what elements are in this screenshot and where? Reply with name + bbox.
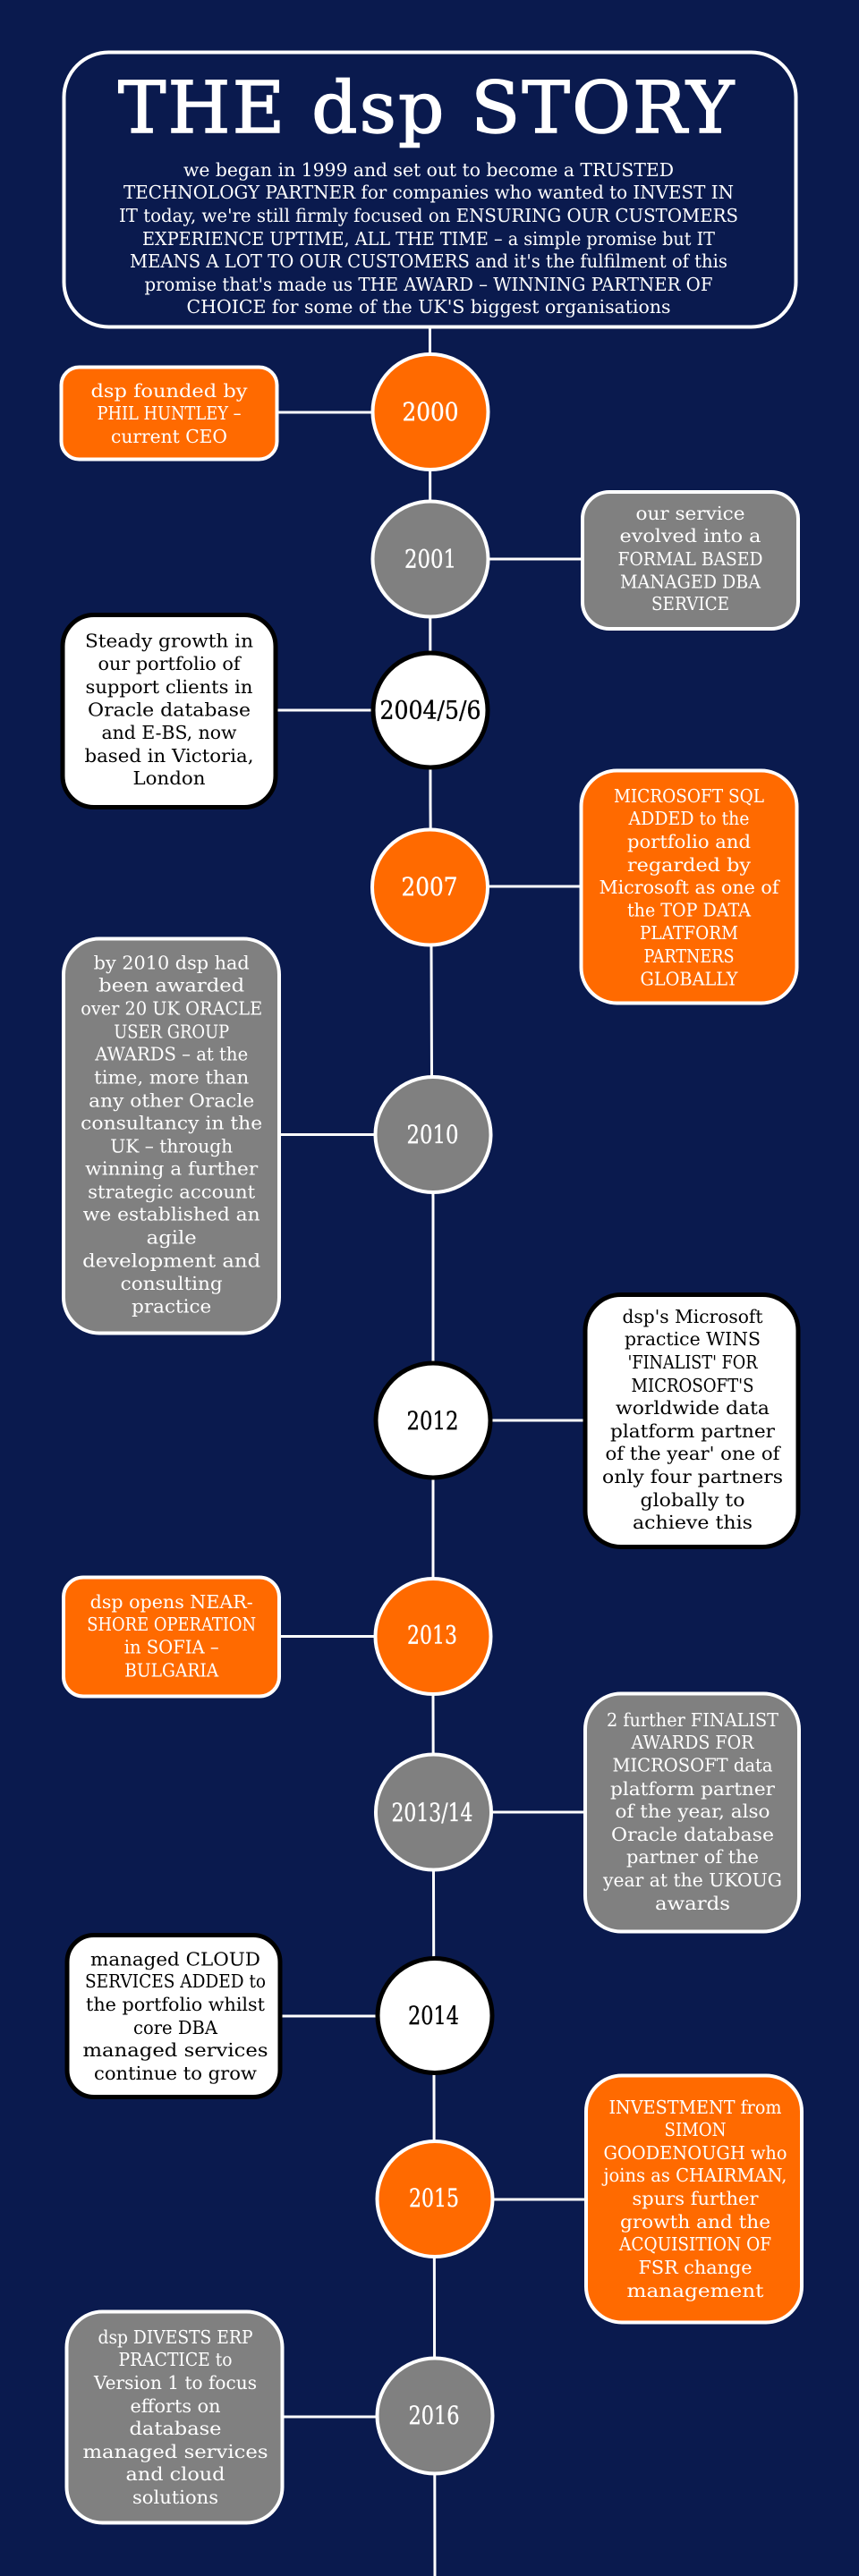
box: 2013/14: year at the UKOUG xyxy=(602,1869,782,1891)
year circle: 2001 xyxy=(372,501,489,617)
box: 2013/14: MICROSOFT data xyxy=(612,1755,773,1776)
box: 2001: evolved into a xyxy=(619,525,761,547)
box: 2012: only four partners xyxy=(602,1466,783,1487)
box: 2016: dsp DIVESTS ERP xyxy=(98,2326,253,2348)
box: 2010: UK – through xyxy=(110,1136,233,1157)
year circle: 2014 xyxy=(378,1959,492,2073)
year circle: 2013 xyxy=(376,1579,490,1694)
box: 2000: PHIL HUNTLEY – xyxy=(97,402,242,424)
box: 2012: achieve this xyxy=(633,1512,753,1533)
box: 2007: PLATFORM xyxy=(640,922,738,944)
box: 2007: portfolio and xyxy=(627,831,751,852)
box: 2015: INVESTMENT from xyxy=(608,2097,782,2118)
year circle: 2013/14: 2013/14 xyxy=(392,1798,472,1827)
box: 2013/14: AWARDS FOR xyxy=(631,1732,754,1753)
timeline spine xyxy=(430,327,435,2576)
box: 2000: current CEO xyxy=(111,426,227,447)
box: 2016: database xyxy=(129,2418,222,2439)
box: 2012: of the year' one of xyxy=(605,1443,781,1464)
year circle: 2010: 2010 xyxy=(406,1120,458,1149)
year circle: 2016: 2016 xyxy=(408,2401,460,2430)
box: 2012: worldwide data xyxy=(616,1397,770,1419)
box: 2001: MANAGED DBA xyxy=(620,571,761,592)
year circle: 2010 xyxy=(376,1077,490,1192)
box: 2010: agile xyxy=(147,1227,197,1249)
entry: 2001 xyxy=(372,492,798,629)
box: 2010: AWARDS – at the xyxy=(94,1043,248,1064)
box: 2010: strategic account xyxy=(88,1181,256,1202)
box: 2001: SERVICE xyxy=(651,593,729,614)
intro text xyxy=(119,159,738,318)
box: 2014: SERVICES ADDED to xyxy=(85,1970,266,1992)
box: 2000 xyxy=(61,367,277,460)
box: 2010: practice xyxy=(132,1295,211,1317)
box: 2001 xyxy=(583,492,798,629)
box: 2010: development and xyxy=(82,1250,260,1272)
box: 2015: FSR change xyxy=(639,2257,752,2278)
box: 2015: GOODENOUGH who xyxy=(603,2142,787,2164)
entry: 2007 xyxy=(372,771,796,1004)
box: 2012 xyxy=(585,1295,798,1547)
box: 2012: 'FINALIST' FOR xyxy=(628,1352,758,1373)
entry: 2004/5/6 xyxy=(63,615,488,807)
box: 2010: been awarded xyxy=(98,975,244,996)
box: 2010: consultancy in the xyxy=(81,1113,262,1134)
box: 2016: efforts on xyxy=(131,2395,220,2417)
box: 2013/14: platform partner xyxy=(610,1778,775,1800)
box: 2004/5/6: London xyxy=(132,767,206,789)
year circle: 2001: 2001 xyxy=(404,544,456,574)
box: 2007: Microsoft as one of xyxy=(600,877,780,898)
box: 2010: we established an xyxy=(83,1204,260,1225)
box: 2014: managed CLOUD xyxy=(90,1948,260,1970)
box: 2010: any other Oracle xyxy=(89,1089,254,1111)
year circle: 2007 xyxy=(372,830,488,945)
box: 2015: spurs further xyxy=(632,2188,759,2209)
intro text: IT today, we're still firmly focused on ENSURING OUR CUSTOMERS xyxy=(119,205,738,226)
entry: 2016 xyxy=(66,2311,492,2522)
box: 2015: ACQUISITION OF xyxy=(618,2233,771,2255)
box: 2013: BULGARIA xyxy=(124,1660,218,1682)
box: 2013/14 xyxy=(585,1694,799,1932)
box: 2013: dsp opens NEAR- xyxy=(90,1591,253,1613)
box: 2016: and cloud xyxy=(125,2463,225,2485)
year circle: 2012: 2012 xyxy=(406,1406,458,1436)
box: 2013/14: 2 further FINALIST xyxy=(607,1709,778,1731)
box: 2013/14: partner of the xyxy=(626,1846,759,1868)
box: 2015: joins as CHAIRMAN, xyxy=(602,2165,787,2186)
box: 2007 xyxy=(582,771,796,1004)
intro text: EXPERIENCE UPTIME, ALL THE TIME – a simple promise but IT xyxy=(142,228,715,250)
box: 2012: MICROSOFT'S xyxy=(632,1375,753,1396)
intro text: MEANS A LOT TO OUR CUSTOMERS and it's the fulfilment of this xyxy=(130,250,727,272)
box: 2014: managed services xyxy=(82,2039,268,2061)
year circle: 2015 xyxy=(378,2141,492,2257)
box: 2016: solutions xyxy=(132,2487,218,2508)
box: 2004/5/6: Steady growth in xyxy=(85,630,253,651)
year circle: 2007: 2007 xyxy=(401,872,458,902)
entry: 2013 xyxy=(64,1578,490,1696)
box: 2004/5/6: based in Victoria, xyxy=(84,745,254,767)
box: 2013/14: of the year, also xyxy=(616,1801,770,1822)
box: 2004/5/6 xyxy=(63,615,276,807)
box: 2001: our service xyxy=(635,503,744,524)
intro text: we began in 1999 and set out to become a TRUSTED xyxy=(183,159,674,181)
box: 2013/14: awards xyxy=(655,1893,730,1914)
year circle: 2015: 2015 xyxy=(409,2183,459,2213)
year circle: 2014: 2014 xyxy=(408,2001,459,2030)
box: 2016: Version 1 to focus xyxy=(93,2372,257,2394)
box: 2016 xyxy=(66,2311,283,2522)
year circle: 2012 xyxy=(376,1363,490,1478)
box: 2013: SHORE OPERATION xyxy=(87,1614,256,1635)
year circle: 2004/5/6 xyxy=(373,653,488,767)
box: 2007: the TOP DATA xyxy=(627,900,751,921)
box: 2015: growth and the xyxy=(620,2211,770,2233)
box: 2016: PRACTICE to xyxy=(118,2349,233,2370)
box: 2014 xyxy=(67,1936,280,2097)
box: 2004/5/6: Oracle database xyxy=(88,699,251,721)
box: 2010: consulting xyxy=(121,1273,223,1294)
year circle: 2013/14 xyxy=(376,1755,491,1869)
year circle: 2004/5/6: 2004/5/6 xyxy=(379,696,481,724)
box: 2007: ADDED to the xyxy=(628,808,750,829)
box: 2013/14: Oracle database xyxy=(611,1824,774,1845)
box: 2014: the portfolio whilst xyxy=(86,1994,266,2015)
entry: 2014 xyxy=(67,1936,492,2097)
box: 2015: SIMON xyxy=(664,2119,727,2140)
year circle: 2016 xyxy=(378,2358,492,2474)
year circle: 2013: 2013 xyxy=(407,1621,457,1649)
intro text: promise that's made us THE AWARD – WINNING PARTNER OF xyxy=(145,274,712,295)
header panel xyxy=(64,52,796,327)
box: 2010: time, more than xyxy=(94,1066,249,1088)
box: 2013: in SOFIA – xyxy=(124,1637,219,1658)
box: 2001: FORMAL BASED xyxy=(617,548,762,570)
entry: 2000 xyxy=(61,354,489,470)
box: 2010 xyxy=(64,939,279,1333)
box: 2016: managed services xyxy=(82,2441,268,2462)
title: THE dsp STORY xyxy=(118,66,735,149)
entry: 2013/14 xyxy=(376,1694,799,1932)
box: 2014: core DBA xyxy=(133,2017,217,2038)
box: 2010: by 2010 dsp had xyxy=(94,952,250,973)
box: 2004/5/6: and E-BS, now xyxy=(102,722,237,743)
intro text: TECHNOLOGY PARTNER for companies who wanted to INVEST IN xyxy=(123,182,734,203)
box: 2012: platform partner xyxy=(610,1420,775,1442)
box: 2010: over 20 UK ORACLE xyxy=(81,998,262,1020)
box: 2015 xyxy=(586,2075,802,2322)
year circle: 2000 xyxy=(372,354,489,470)
box: 2007: GLOBALLY xyxy=(641,968,738,989)
year circle: 2000: 2000 xyxy=(403,397,458,427)
entry: 2010 xyxy=(64,939,490,1333)
box: 2007: regarded by xyxy=(627,854,751,876)
box: 2015: management xyxy=(626,2280,764,2301)
intro text: CHOICE for some of the UK'S biggest organisations xyxy=(186,296,671,318)
box: 2000: dsp founded by xyxy=(91,380,248,402)
box: 2007: MICROSOFT SQL xyxy=(614,785,764,807)
entry: 2012 xyxy=(376,1295,798,1547)
box: 2004/5/6: our portfolio of xyxy=(98,653,242,674)
box: 2012: globally to xyxy=(641,1489,744,1511)
box: 2014: continue to grow xyxy=(94,2063,257,2084)
box: 2012: practice WINS xyxy=(625,1328,761,1350)
box: 2004/5/6: support clients in xyxy=(86,676,252,698)
box: 2007: PARTNERS xyxy=(644,945,734,967)
box: 2013 xyxy=(64,1578,279,1696)
entry: 2015 xyxy=(378,2075,802,2322)
box: 2012: dsp's Microsoft xyxy=(623,1306,763,1327)
box: 2010: USER GROUP xyxy=(114,1021,229,1043)
box: 2010: winning a further xyxy=(85,1157,258,1179)
